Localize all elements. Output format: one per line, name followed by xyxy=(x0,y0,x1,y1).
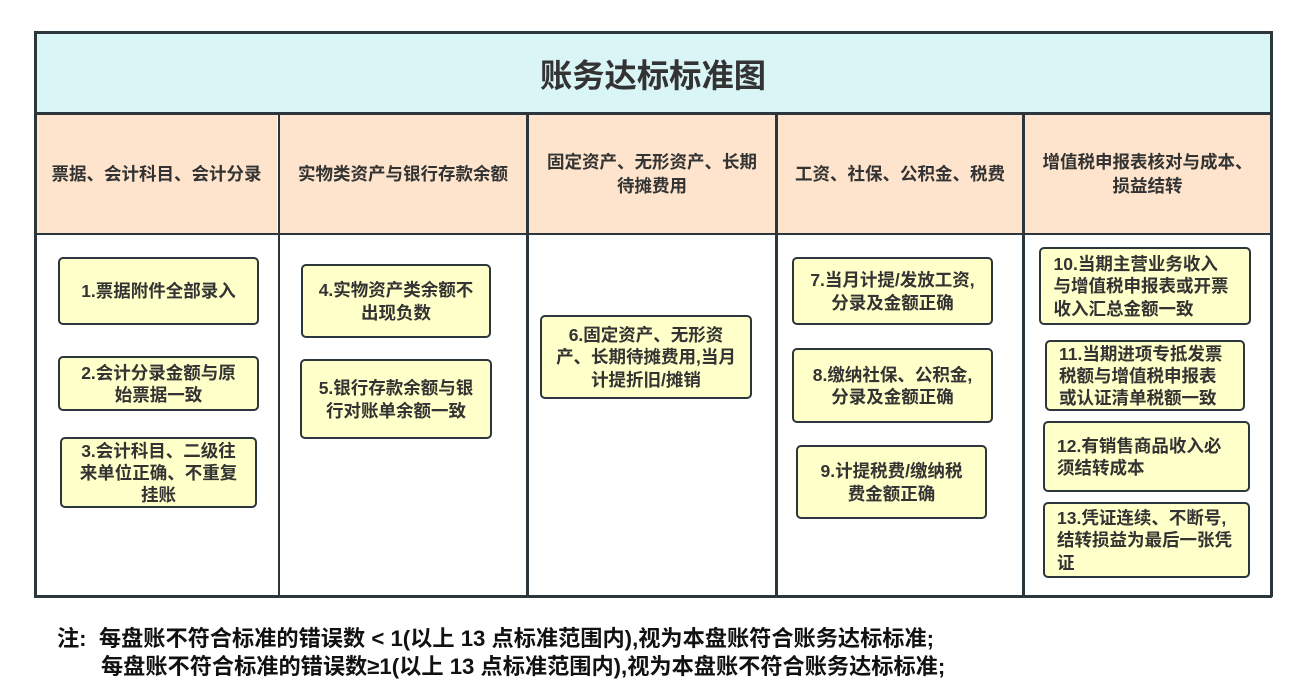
item 13: 13.凭证连续、不断号, xyxy=(1057,508,1226,528)
item 5: 行对账单余额一致 xyxy=(326,400,466,420)
item 2: 2.会计分录金额与原 xyxy=(81,363,236,383)
item 2 xyxy=(58,356,259,411)
item 6: 产、长期待摊费用,当月 xyxy=(556,347,736,367)
footnote line 2: 每盘账不符合标准的错误数≥1(以上 13 点标准范围内),视为本盘账不符合账务达标标准; xyxy=(101,654,945,679)
item 1 xyxy=(58,257,259,325)
item 12 xyxy=(1043,421,1250,492)
column header 5 xyxy=(1025,114,1270,233)
column header 3 xyxy=(529,114,775,233)
item 12: 12.有销售商品收入必 xyxy=(1057,436,1221,456)
item 2: 始票据一致 xyxy=(115,385,202,405)
item 4: 出现负数 xyxy=(361,302,431,322)
item 8: 分录及金额正确 xyxy=(831,387,954,407)
column header 4 xyxy=(778,114,1022,233)
item 3: 挂账 xyxy=(141,485,176,505)
item 11: 11.当期进项专抵发票 xyxy=(1059,344,1222,364)
column header 1: 票据、会计科目、会计分录 xyxy=(52,164,262,184)
item 11 xyxy=(1045,340,1245,411)
item 10: 10.当期主营业务收入 xyxy=(1054,254,1218,274)
column header 3: 固定资产、无形资产、长期 xyxy=(547,152,757,172)
item 7: 7.当月计提/发放工资, xyxy=(810,270,975,290)
column header 5: 增值税申报表核对与成本、 xyxy=(1042,152,1252,172)
item 4: 4.实物资产类余额不 xyxy=(319,280,473,300)
item 13: 证 xyxy=(1057,553,1074,573)
column header 5: 损益结转 xyxy=(1112,176,1182,196)
item 6: 计提折旧/摊销 xyxy=(591,370,701,390)
column header 1 xyxy=(36,114,277,233)
column header 2 xyxy=(280,114,526,233)
item 13: 结转损益为最后一张凭 xyxy=(1057,530,1232,550)
item 9: 9.计提税费/缴纳税 xyxy=(821,461,962,481)
column header 3: 待摊费用 xyxy=(617,176,687,196)
item 10: 与增值税申报表或开票 xyxy=(1054,276,1228,296)
item 5 xyxy=(300,359,492,439)
title banner: 账务达标标准图 xyxy=(540,58,766,94)
item 3: 3.会计科目、二级往 xyxy=(81,441,236,461)
item 6 xyxy=(540,315,752,399)
column header 4: 工资、社保、公积金、税费 xyxy=(795,164,1005,184)
item 10: 收入汇总金额一致 xyxy=(1054,299,1194,319)
item 7: 分录及金额正确 xyxy=(831,292,954,312)
footnote line 1: 注: 每盘账不符合标准的错误数 < 1(以上 13 点标准范围内),视为本盘账符合账务达标标准; xyxy=(57,626,934,651)
footnote xyxy=(57,626,945,679)
item 5: 5.银行存款余额与银 xyxy=(319,378,473,398)
item 12: 须结转成本 xyxy=(1057,458,1144,478)
item 11: 或认证清单税额一致 xyxy=(1059,388,1216,408)
item 11: 税额与增值税申报表 xyxy=(1059,366,1216,386)
item 9: 费金额正确 xyxy=(848,484,935,504)
item 10 xyxy=(1039,247,1251,325)
column header 2: 实物类资产与银行存款余额 xyxy=(298,164,508,184)
item 8: 8.缴纳社保、公积金, xyxy=(813,365,972,385)
title banner xyxy=(35,33,1271,114)
item 4 xyxy=(301,264,491,338)
item 8 xyxy=(792,348,993,423)
item 13 xyxy=(1043,502,1250,578)
item 1: 1.票据附件全部录入 xyxy=(81,281,236,301)
item 6: 6.固定资产、无形资 xyxy=(569,325,723,345)
item 9 xyxy=(796,445,987,519)
item 7 xyxy=(792,257,993,325)
item 3: 来单位正确、不重复 xyxy=(80,463,237,483)
item 3 xyxy=(60,437,257,508)
